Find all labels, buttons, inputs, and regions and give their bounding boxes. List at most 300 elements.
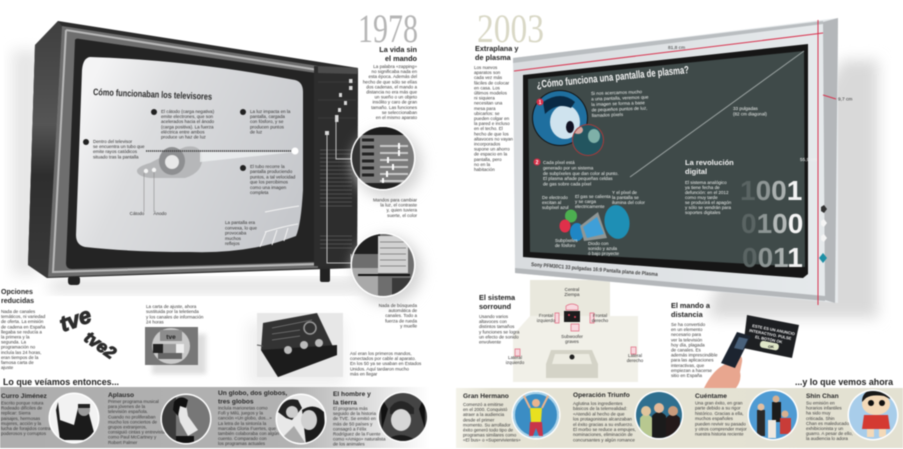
text: opciones reducidas: de oferta. La emisión [1, 319, 44, 324]
bezel highlight [53, 30, 318, 272]
plasma case [513, 18, 838, 303]
speaker labels: Frontal [593, 313, 607, 318]
text: el sistema sorround: envolvente [479, 340, 501, 344]
icon: interactive ad card: EL BOTÓN OK [755, 334, 783, 344]
caption: carta de ajuste: sustituida por la teletienda [146, 309, 199, 314]
explanation 2: de gas sobre cada píxel [543, 182, 591, 187]
heading: extraplana y de plasma: de plasma [475, 53, 512, 62]
text: extraplana y de plasma: pantalla, pero [474, 157, 502, 162]
programme: El hombre y la tierra: El hombre y [333, 391, 371, 398]
badge 1 [536, 98, 544, 106]
programme: Un globo, dos globos, tres globos: canción «Un globo, dos...» [218, 416, 272, 421]
caption: carta de ajuste: y los canales de información [146, 314, 204, 319]
note: convex screen: La pantalla era [225, 220, 256, 225]
heading: extraplana y de plasma: Extraplana y [475, 44, 519, 53]
callout 2 [151, 109, 215, 140]
text: el mando a distancia: además imprescindible [671, 353, 718, 358]
explanation 1: de pequeños puntos de luz, [591, 106, 647, 112]
text: la revolución digital: como muy tarde [685, 195, 718, 200]
text: la revolución digital: El sistema analógico [685, 180, 727, 185]
speaker labels: Ziempa [564, 292, 580, 297]
explanation 1: la imagen se forma a base [591, 100, 645, 107]
note: convex screen: convexa, lo que [225, 225, 257, 230]
speaker labels: derecho [592, 318, 609, 323]
programme: Curro Jiménez: Curro Jiménez [1, 393, 48, 400]
heading: y lo que vemos ahora: ...y lo que vemos ahora [795, 377, 894, 388]
caption: primeros mandos: Así eran los primeros mandos, [350, 351, 412, 356]
diagonal measure [630, 51, 804, 177]
caption: mandos: la luz, el contraste [380, 203, 417, 208]
text: la vida sin el mando: hecho de que sólo se elías [363, 79, 418, 84]
text: extraplana y de plasma: cada vez más [474, 75, 503, 80]
diagram labels: electricamente [575, 204, 605, 209]
caption: búsqueda de canales: Nada de búsqueda [379, 303, 417, 308]
speaker labels: Subwoofer [561, 334, 583, 339]
programme: Gran Hermano [463, 390, 560, 443]
binary digits: 1001 [740, 175, 802, 206]
callout 2: emite electrones, que son [161, 114, 214, 119]
programme: Aplauso: Robert Palmer [108, 440, 138, 445]
text: opciones reducidas: llegaba se reducía a [1, 329, 42, 334]
height label: 55,9 cm [800, 157, 817, 163]
text: el mando a distancia: para las aplicaciones [671, 358, 714, 363]
text: extraplana y de plasma: hecho de que los [474, 131, 509, 136]
programme: Un globo, dos globos, tres globos: cuento. Comparado con [218, 436, 267, 441]
text: opciones reducidas: temáticos, ni variedad [1, 314, 46, 319]
text: opciones reducidas: eran tiempos de la [1, 355, 39, 360]
text: extraplana y de plasma: en casa. Los [474, 85, 501, 90]
programme: El hombre y la tierra: Rodríguez de la Fuente [333, 432, 381, 436]
icon: interactive ad card: ESTE ES UN ANUNCIO [752, 323, 795, 336]
heading: la revolución digital: La revolución [685, 158, 734, 167]
diagram labels: y se carga [575, 199, 596, 204]
text: extraplana y de plasma: mesa para [474, 106, 496, 111]
callout 3: de luz [250, 129, 263, 134]
speaker labels: graves [565, 339, 580, 344]
explanation 2: de subpíxeles que dan color al punto. [543, 171, 619, 176]
silver bezel [48, 26, 318, 277]
callout 2: (carga positiva). La fuerza [161, 124, 214, 129]
screen title: ¿Cómo funciona una pantalla de plasma? [536, 64, 690, 91]
heading: el mando a distancia: El mando a [671, 301, 711, 310]
caption: mandos: suerte, el color [387, 213, 417, 218]
diagram labels: Diodo con [588, 241, 609, 246]
dimension labels: 81,8 cm [668, 45, 685, 51]
callout 4 [240, 164, 296, 195]
programme: Aplauso: grupos extranjeros, [108, 424, 147, 430]
callout 4: completa [250, 190, 269, 195]
programme: Operación Triunfo [573, 390, 684, 442]
icon: interactive ad card [743, 315, 799, 358]
badge 1: 1 [539, 100, 542, 106]
note: convex screen: provocaba [225, 231, 247, 236]
text: la vida sin el mando: tamaño. Las funciones [371, 105, 418, 110]
panel: 1978 old television [12, 21, 360, 292]
text: la revolución digital: defunción: en el 2012 [685, 190, 729, 195]
text: opciones reducidas: de cadena en España [1, 324, 46, 329]
text: extraplana y de plasma: incorporados [474, 142, 501, 146]
programme: Cuéntame: Una gran éxito, en gran [695, 400, 743, 406]
photo: face close-up [530, 90, 590, 146]
detail circle: tuning buttons [350, 232, 422, 304]
programme: Gran Hermano: momento. Su arrollador [463, 422, 511, 427]
logo: tve 2: tve2 [81, 328, 120, 363]
programme: Curro Jiménez: replicar: Sierra [1, 411, 31, 416]
programme: Curro Jiménez: Escrito porque rotura [1, 400, 44, 406]
image: early remote control [248, 313, 344, 386]
text: opciones reducidas: programación no [1, 345, 36, 350]
programme: Un globo, dos globos, tres globos: La letra de la sintonía la [218, 421, 267, 426]
programme: Operación Triunfo: el éxito gracias a su esfuerzo. [573, 422, 633, 427]
sofa [546, 350, 598, 378]
programme: Cuéntame: parte debido a su rigor [695, 406, 741, 411]
screen diagram: speakers and TV [515, 304, 636, 356]
programme: Operación Triunfo: los protagonistas alcanzaban [573, 417, 632, 422]
text: el mando a distancia: de canales. Es [671, 348, 702, 352]
programme: Aplauso: Cuando no proliferaban [108, 414, 156, 419]
explanation 2: Cada píxel está [543, 160, 575, 165]
diagram labels: excitan al [542, 200, 561, 205]
screen reflections [260, 206, 299, 247]
programme: Gran Hermano: Comenzó a emitirse [463, 402, 504, 407]
labels: cathode and anode: Cátodo [130, 211, 145, 216]
text: extraplana y de plasma: en el techo. El [474, 126, 503, 131]
binary digits: 0100 [741, 208, 803, 239]
programme: Shin Chan: ha sido muy [806, 411, 831, 416]
programme: Un globo, dos globos, tres globos: Fofi y Milú, juegos y la [218, 411, 263, 416]
explanation 1: a una pantalla, veremos que [591, 94, 649, 101]
text: la vida sin el mando: no significaba nada en [371, 69, 417, 74]
diagram labels: ilumina del color [612, 200, 645, 205]
text: el sistema sorround: altavoces con [479, 319, 507, 324]
callout 3: producen puntos [250, 124, 285, 129]
panel: plasma television [513, 18, 878, 318]
programme: Aplauso: como Paul McCartney y [108, 435, 157, 440]
programme: Aplauso: para jóvenes de la [108, 404, 146, 409]
dimension lines [514, 20, 836, 305]
dark bezel [66, 39, 316, 269]
caption: primeros mandos: En los 50 ya se usaban en Estados [350, 361, 422, 366]
speaker labels: Central [565, 287, 579, 292]
heading: opciones reducidas: reducidas [1, 298, 34, 305]
text: el sistema sorround: Usando varios [479, 314, 509, 319]
speaker labels: Lateral [628, 353, 642, 358]
text: el sistema sorround: distintos tamaños [479, 324, 515, 329]
text: extraplana y de plasma: pueden colgar en [474, 116, 510, 121]
image: test card: tve [166, 334, 176, 341]
programme: El hombre y la tierra [333, 391, 428, 447]
diagram labels: la pantalla se [612, 195, 639, 200]
text: opciones reducidas: segunda. La [1, 340, 27, 345]
explanation 1: llamados píxels [592, 112, 624, 118]
heading: la vida sin el mando: La vida sin [379, 45, 417, 54]
text: extraplana y de plasma: la pared e incluso [474, 121, 510, 126]
callout 4: como una imagen [250, 185, 287, 190]
text: extraplana y de plasma: ubicarlos: se [474, 111, 500, 116]
explanation 2: generado por un sistema [543, 165, 594, 170]
text: la vida sin el mando: insólito y caro de gran [373, 100, 417, 105]
programme: El hombre y la tierra: consagró a Félix [333, 426, 367, 431]
programme: Cuéntame: muchos españoles [695, 416, 734, 421]
heading: la vida sin el mando: el mando [385, 54, 418, 63]
callout 1: se encuentra un tubo que [93, 144, 145, 149]
text: el sistema sorround: un efecto de sonido [479, 334, 519, 339]
text: la vida sin el mando: esta época. Además del [368, 74, 417, 79]
programme: Operación Triunfo: Operación Triunfo [573, 392, 630, 399]
diagram labels: sonido y azula [588, 246, 618, 251]
caption: mandos: y, quien tuviera [386, 208, 417, 213]
caption: búsqueda de canales: canales. Todo a [385, 313, 417, 318]
text: opciones reducidas: Nada de canales [1, 309, 36, 314]
text: la vida sin el mando: distancia no era más que [366, 90, 417, 94]
text: la revolución digital: ya tiene fecha de [685, 185, 720, 190]
text: extraplana y de plasma: ni siquiera [474, 96, 495, 101]
callout 1 [83, 139, 145, 159]
programme: El hombre y la tierra: seguido de la historia [333, 411, 376, 416]
diagram labels: ó bajo proyecte [588, 251, 620, 256]
programme: Curro Jiménez: paisajes, hermosas [1, 416, 41, 421]
programme: Shin Chan: la audiencia lo adora [806, 436, 848, 441]
text: la vida sin el mando: dos cadenas, el mando a [366, 84, 417, 89]
programme: Curro Jiménez: Rodeado difíciles de [1, 406, 43, 411]
programme: Operación Triunfo: concursantes y algún romance [573, 437, 635, 442]
speaker labels: izquierdo [537, 318, 556, 323]
programme: Shin Chan: Su emisión en [806, 400, 835, 406]
panel: surround room [506, 280, 644, 382]
text: extraplana y de plasma: supone un ahorro [474, 147, 510, 152]
text: el mando a distancia: sitio en España [671, 373, 703, 378]
callout 4: El tubo recorre la [250, 164, 285, 169]
year 1978: 1978 [358, 6, 418, 51]
text: el mando a distancia: Se ha convertido [671, 322, 706, 327]
text: extraplana y de plasma: habitación [474, 167, 495, 172]
explanation 1: Si nos acercamos mucho [591, 89, 643, 96]
programme: Cuéntame: Cuéntame [695, 393, 727, 400]
caption: búsqueda de canales: y muelle [400, 323, 417, 328]
year 2003: 2003 [477, 6, 544, 51]
programme: Aplauso: mucho los conciertos de [108, 419, 158, 424]
caption: mandos: Mandos para cambiar [373, 198, 417, 202]
text: el mando a distancia: necesario para [671, 332, 702, 337]
callout 1: emite rayos catódicos [93, 149, 138, 154]
dimension labels: 9,7 cm [838, 96, 852, 102]
speaker labels: Lateral [508, 355, 522, 360]
programme: Cuéntame: histórico. Gracias a ella, [695, 411, 744, 416]
programme: Aplauso: Aplauso [108, 392, 134, 399]
caption: primeros mandos: Unidos. Aquí tardaron mucho [350, 366, 409, 371]
caption: carta de ajuste: 24 horas [146, 320, 164, 325]
programme: Gran Hermano: desde el primer [463, 417, 495, 422]
programme: Aplauso: consiguió cintas y entrevistas [108, 430, 168, 435]
programme: Operación Triunfo: Aglutina los ingredientes [573, 401, 623, 406]
callout 3: pantalla, cargada [250, 114, 285, 119]
binary digits [740, 175, 803, 273]
diagonal label: (82 cm diagonal) [733, 112, 767, 116]
diagram labels: Subpíxeles [555, 238, 578, 243]
programme: Shin Chan: horarios infantiles [806, 406, 842, 411]
text: extraplana y de plasma: altavoces no vayan [474, 136, 513, 141]
programme: Shin Chan [806, 389, 898, 441]
icon: interactive ad card: OK [768, 344, 774, 349]
programme: Shin Chan: guarro. A pesar de ello, [806, 431, 853, 436]
diagonal label: 33 pulgadas [733, 106, 759, 111]
programme: Gran Hermano: en el 2000. Conquistó [463, 407, 508, 412]
labels: cathode and anode: Ánodo [153, 210, 167, 216]
programme: Aplauso: Primer programa musical [108, 399, 159, 404]
heading: how televisions worked: Cómo funcionaban los televisores [93, 87, 212, 102]
text: la revolución digital: se producirá el apagón [685, 200, 732, 205]
callout 4: que los percibimos [250, 180, 289, 185]
speaker labels: Frontal [539, 313, 553, 318]
detail circle: control sliders [350, 125, 422, 198]
callout 4: pantalla produciendo [250, 169, 293, 174]
caption: primeros mandos: más en llegar [350, 371, 378, 376]
programme: Shin Chan: Shin Chan [806, 393, 839, 400]
diagram labels: El gas se calienta [575, 194, 611, 199]
programme: El hombre y la tierra: El programa más [333, 406, 368, 411]
caption: primeros mandos: conectados por cable al aparato. [350, 356, 416, 361]
programme: Un globo, dos globos, tres globos: tres globos [218, 398, 254, 406]
note: convex screen: muchos [225, 236, 242, 241]
cabinet side [28, 21, 62, 278]
icon: hand with remote [704, 332, 751, 388]
callout 1: Dentro del televisor [93, 139, 133, 144]
caption: búsqueda de canales: automática de [388, 308, 417, 313]
icon: television feet [68, 266, 330, 285]
text: extraplana y de plasma: no en la [474, 162, 491, 167]
diagram labels: de fósforo [555, 243, 576, 248]
programme: Curro Jiménez: lucha de forajidos contra [1, 426, 51, 431]
panel: programmes then [0, 387, 430, 448]
diagram: cathode ray tube [137, 146, 298, 212]
heading: opciones reducidas: Opciones [1, 289, 33, 296]
callout 4: puntos, a tal velocidad [250, 174, 296, 179]
programme: Shin Chan: Chan es maleducado, [806, 421, 850, 426]
speaker labels: izquierdo [506, 360, 525, 365]
panel: programmes now [456, 388, 903, 448]
text: la vida sin el mando: un sueño o un objeto [375, 95, 417, 100]
note: convex screen: reflejos [225, 241, 240, 246]
programme: Gran Hermano: éxito generó todo tipo de [463, 428, 514, 432]
control panel [314, 66, 358, 268]
callout 2: acelerados hacia el ánodo [161, 119, 215, 124]
programme: Gran Hermano: «El bus» o «Supervivientes» [463, 438, 521, 443]
diagram: plasma cell [560, 203, 632, 241]
icon: interactive ad card: INTERACTIVO. PULSE [749, 328, 792, 341]
speaker labels: derecho [627, 358, 644, 363]
callout 3: La luz impacta en la [250, 109, 291, 114]
callout 1: situado tras la pantalla [93, 154, 139, 159]
text: el mando a distancia: en un elemento [671, 327, 703, 332]
callout 2: produce un haz de luz [161, 134, 206, 140]
logo: tve: tve [56, 302, 95, 337]
caption: búsqueda de canales: fuerza de rueda [385, 318, 417, 323]
heading: lo que veíamos entonces: Lo que veíamos entonces... [3, 377, 119, 388]
text: el mando a distancia: ver la televisión [671, 337, 703, 342]
callout 3 [240, 109, 291, 134]
screen [76, 57, 303, 252]
programme: Operación Triunfo: «Atendió al hecho de que [573, 411, 625, 416]
programme: Gran Hermano: programas similares como [463, 433, 517, 438]
heading: el sistema sorround: El sistema [479, 293, 516, 302]
text: extraplana y de plasma: aparatos son [474, 70, 501, 75]
text: la vida sin el mando: se seleccionaban [382, 110, 417, 115]
plasma screen [523, 44, 808, 278]
text: opciones reducidas: la primera y la [1, 334, 30, 340]
programme: Aplauso [108, 392, 212, 445]
programme: El hombre y la tierra: más de 50 países y [333, 421, 373, 426]
side buttons [819, 205, 827, 263]
programme: Operación Triunfo: básicos de la telerrealidad: [573, 406, 627, 411]
badge 2: 2 [536, 160, 539, 166]
programme: Shin Chan: exhibicionista y un [806, 426, 844, 431]
programme: Curro Jiménez: mujeres, acción y la [1, 421, 42, 426]
text: el mando a distancia: hoy día, plagada [671, 342, 705, 347]
programme: Cuéntame: pueden revivir su pasado [695, 421, 746, 426]
text: opciones reducidas: ajuste [1, 365, 14, 370]
programme: Aplauso: televisión española. [108, 409, 148, 414]
programme: Gran Hermano: Gran Hermano [463, 393, 509, 400]
explanation 2: El plasma añade pequeñas celdas [543, 176, 613, 181]
heading: la revolución digital: digital [685, 167, 707, 176]
heading: el mando a distancia: distancia [671, 310, 704, 319]
badge 2 [534, 158, 540, 166]
text: extraplana y de plasma: de espacio en la [474, 152, 508, 157]
text: la vida sin el mando: en el mismo aparato [376, 115, 417, 120]
text: extraplana y de plasma: últimos modelos [474, 90, 508, 96]
text: el mando a distancia: interactivas, que [671, 363, 705, 368]
caption: carta de ajuste: La carta de ajuste, ahora [146, 304, 197, 309]
programme: Curro Jiménez: poderosos y corruptos [1, 431, 47, 436]
programme: El hombre y la tierra: de TVE. Se emitió en [333, 416, 376, 421]
diagram labels: De electrodo [542, 195, 568, 200]
photo: pixel close-up [570, 124, 606, 156]
text: la vida sin el mando: La palabra «zapping» [373, 64, 417, 69]
heading: el sistema sorround: sorround [479, 302, 511, 311]
text: extraplana y de plasma: necesitan una [474, 101, 503, 106]
callout 3: con fósforo, y se [250, 119, 284, 124]
programme: Gran Hermano: atraer a la audiencia [463, 412, 505, 417]
text: la revolución digital: soportes digitales [685, 210, 721, 215]
text: extraplana y de plasma: fáciles de colocar [474, 80, 510, 85]
programme: Un globo, dos globos, tres globos: Un globo, dos globos, [218, 390, 287, 397]
programme: Operación Triunfo: nominaciones, eliminación de [573, 432, 633, 437]
text: el sistema sorround: y funciones se logra [479, 329, 520, 334]
model caption: Sony PFM30C1 33 pulgadas 16:9 Pantalla plana de Plasma [531, 262, 658, 278]
programme: Un globo, dos globos, tres globos [218, 390, 327, 446]
programme: Un globo, dos globos, tres globos: marcaba Gloria Fuertes, que [218, 426, 276, 431]
programme: Cuéntame [695, 390, 798, 440]
text: opciones reducidas: incluía las 24 horas, [1, 350, 41, 355]
text: el mando a distancia: empiezan a hacerse [671, 368, 712, 373]
programme: Curro Jiménez [1, 392, 100, 444]
diagram labels: Y el píxel de [612, 190, 637, 195]
programme: El hombre y la tierra: como «Amigo» naturalista [333, 437, 386, 442]
programme: Cuéntame: nuestra historia reciente [695, 432, 744, 437]
binary digits: 0011 [742, 242, 803, 273]
programme: Operación Triunfo: El morbo se reduce a empujes, [573, 427, 636, 432]
callout 2: eléctrica entre ambos [161, 129, 205, 134]
programme: El hombre y la tierra: la tierra [333, 400, 357, 406]
programme: Shin Chan: criticada. Shin [806, 416, 835, 421]
programme: Un globo, dos globos, tres globos: Incluía marionetas como [218, 406, 268, 410]
callout 2: El cátodo (carga negativa) [161, 109, 215, 114]
image: test card [145, 327, 206, 374]
television cabinet [28, 21, 358, 278]
programme: Un globo, dos globos, tres globos: los programas actuales [218, 441, 266, 446]
programme: Cuéntame: y otros comprender mejor [695, 426, 747, 432]
programme: El hombre y la tierra: de los animales [333, 442, 365, 447]
